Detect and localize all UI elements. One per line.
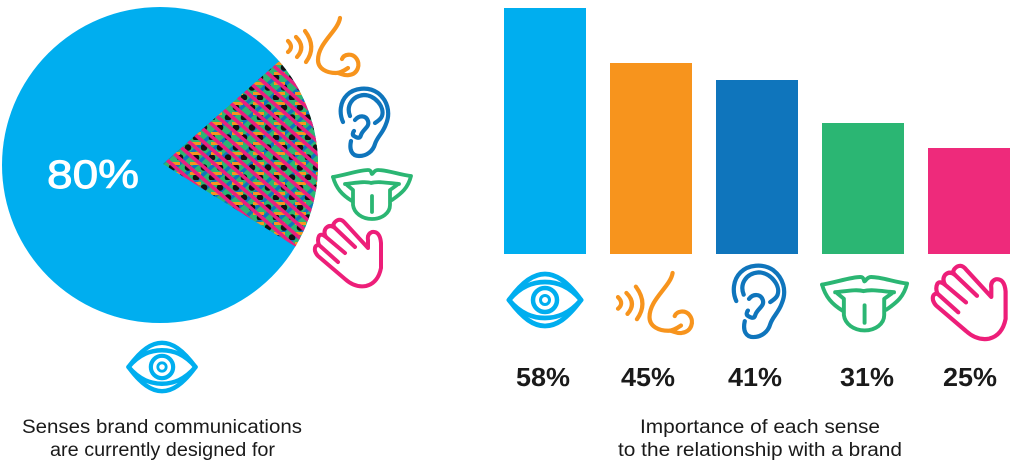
bar: taste 31% (822, 123, 904, 254)
percentage labels: 25% (943, 362, 997, 392)
caption: pie chart (22, 417, 302, 461)
caption: pie chart: Senses brand communications (22, 417, 302, 438)
icon: mouth and tongue (822, 277, 907, 330)
bar: hearing 41% (716, 80, 798, 254)
bar: sight 58% (504, 8, 586, 254)
caption: bar chart: to the relationship with a brand (618, 440, 902, 461)
icon: nose (618, 273, 692, 333)
icon: ear (341, 89, 388, 156)
icon: ear (734, 266, 784, 337)
caption: bar chart: Importance of each sense (640, 417, 880, 438)
pie value label: 80% (47, 153, 139, 197)
percentage labels: 31% (840, 362, 894, 392)
bar chart: importance of each sense (504, 8, 1010, 254)
percentage labels: 58% (516, 362, 570, 392)
caption: pie chart: are currently designed for (50, 440, 276, 461)
icon: hand (315, 220, 381, 286)
bar: touch 25% (928, 148, 1010, 254)
pie slice: sight (2, 7, 318, 323)
pie chart: 80% sight (2, 7, 340, 323)
icon: eye (129, 343, 195, 391)
icon: nose (288, 18, 358, 75)
percentage labels: 45% (621, 362, 675, 392)
percentage labels: 41% (728, 362, 782, 392)
icon: hand (933, 266, 1006, 339)
icon: mouth and tongue (333, 170, 411, 219)
pie slice: other senses patterned wedge (163, 61, 318, 246)
caption: bar chart (618, 417, 902, 461)
percentage labels (516, 362, 997, 392)
bar: smell 45% (610, 63, 692, 254)
icon: eye (509, 274, 581, 326)
